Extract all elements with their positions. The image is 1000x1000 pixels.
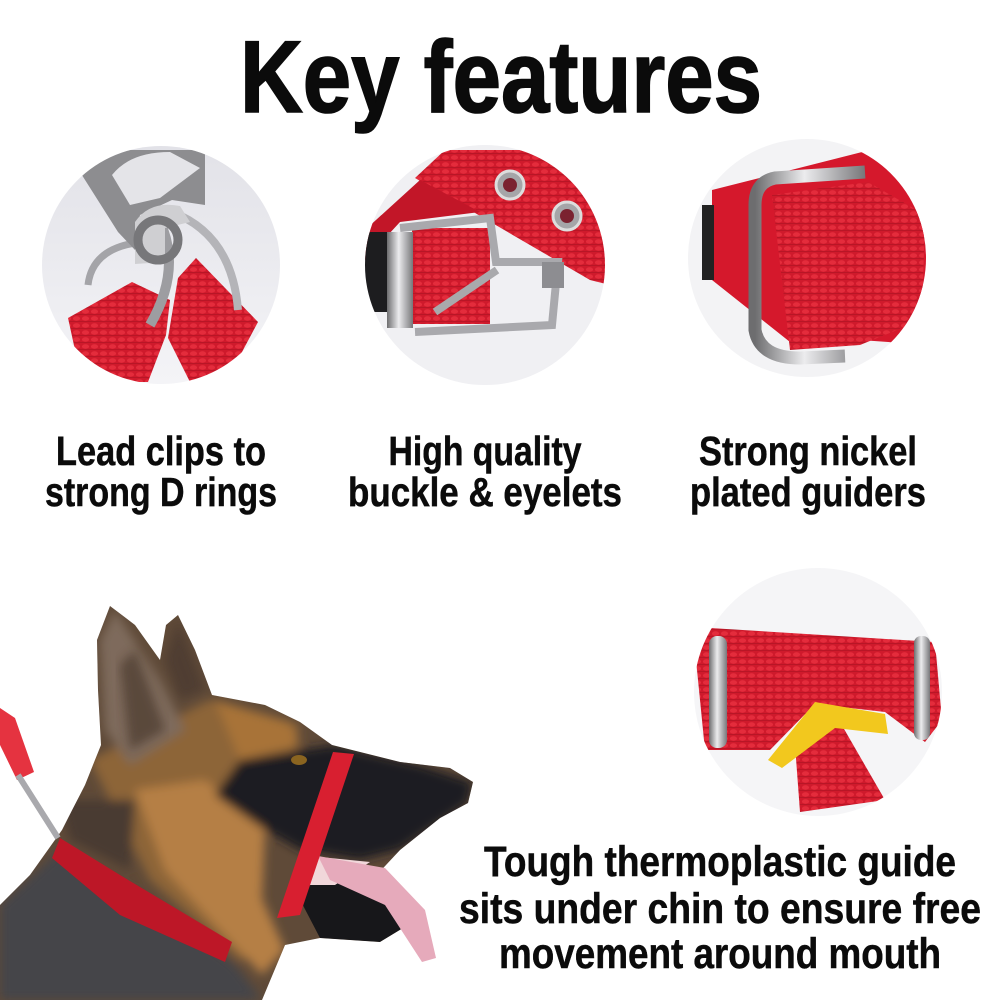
dog fur layers [0, 600, 480, 1000]
lead clip [18, 775, 58, 838]
tongue [318, 856, 436, 962]
caption: buckle [348, 428, 622, 515]
red muzzle strap [277, 752, 354, 918]
caption: buckle: High quality [388, 428, 582, 474]
caption: D rings [45, 428, 277, 515]
caption: guiders [690, 428, 926, 515]
eye [291, 755, 307, 765]
caption: D rings: strong D rings [45, 469, 277, 515]
dog photo [0, 600, 480, 1000]
panel: guiders photo [688, 139, 930, 377]
panel: D rings photo [42, 146, 280, 384]
lead [0, 708, 34, 780]
caption: guiders: Strong nickel [699, 428, 917, 474]
caption: thermoplastic guide [459, 838, 981, 978]
panel: thermoplastic guide photo [694, 568, 942, 816]
caption: D rings: Lead clips to [56, 428, 266, 474]
caption: buckle: buckle & eyelets [348, 469, 622, 515]
red collar [52, 838, 232, 962]
caption: thermoplastic guide: movement around mouth [499, 930, 941, 978]
title: Key features [240, 20, 762, 134]
panel: buckle photo [365, 145, 610, 385]
caption: guiders: plated guiders [690, 469, 926, 515]
